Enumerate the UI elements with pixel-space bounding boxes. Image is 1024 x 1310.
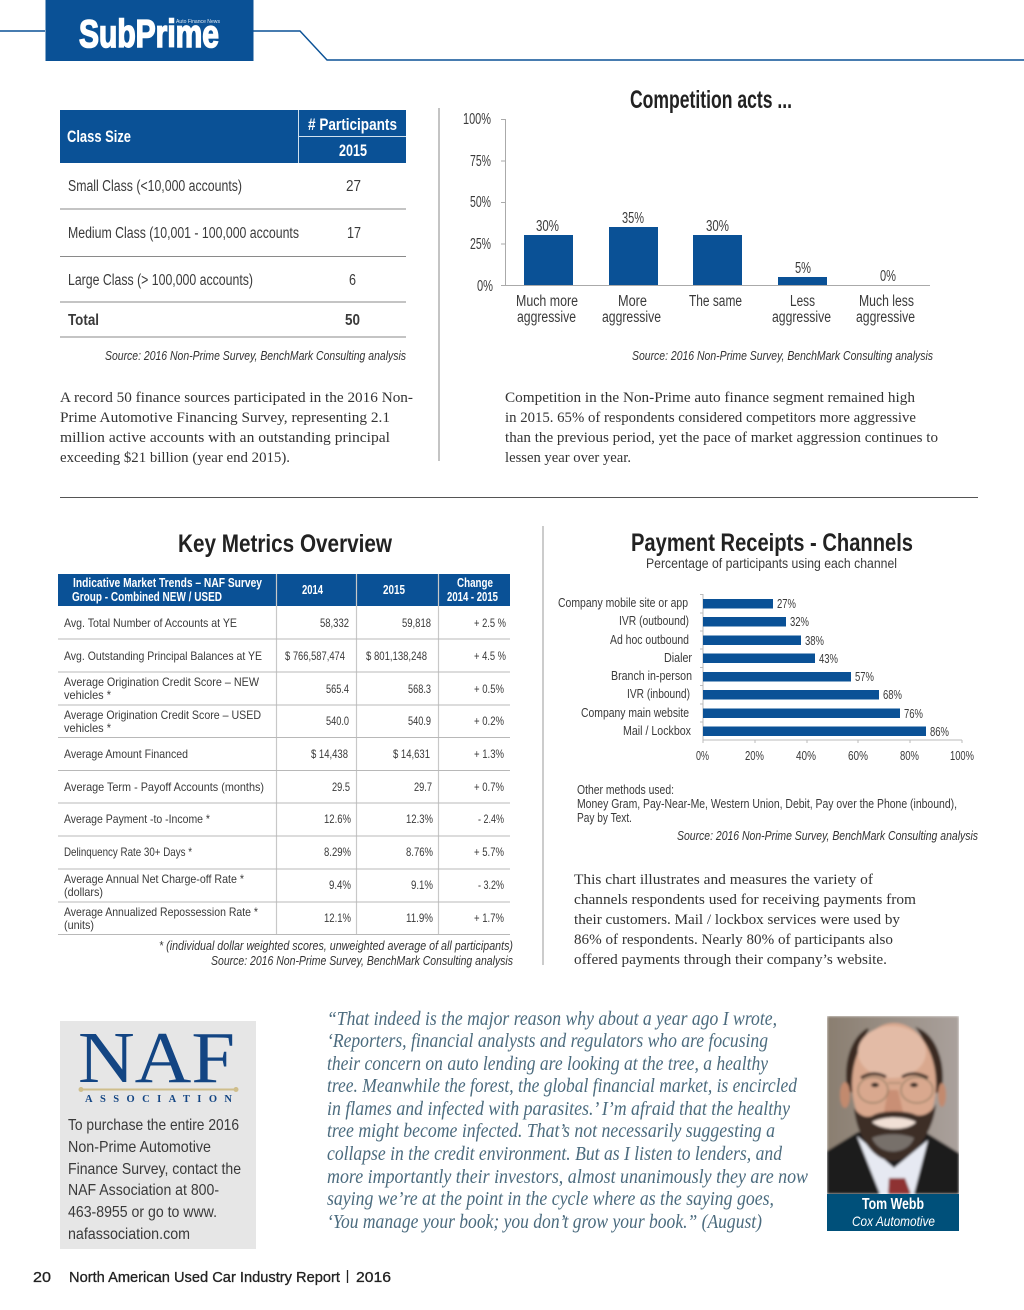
key metrics table: 8.29%	[324, 845, 351, 859]
class size table: Small Class (<10,000 accounts)	[68, 178, 242, 195]
NAF logo: ASSOCIATION	[85, 1094, 232, 1105]
key metrics table: 540.9	[408, 714, 431, 728]
masthead: Auto Finance News	[176, 19, 220, 25]
key metrics table: + 0.5%	[474, 682, 504, 696]
glasses	[858, 1077, 888, 1103]
key metrics table: 2014 - 2015	[447, 590, 498, 604]
hair sides	[847, 1029, 942, 1092]
paragraph: competition: in 2015. 65% of respondents considered competitors more aggressive	[505, 410, 916, 426]
paragraph: channels: their customers. Mail / lockbox services were used by	[574, 912, 900, 928]
key metrics table: (dollars)	[64, 885, 103, 899]
pull quote: in flames and infected with parasites.’ I’m afraid that the healthy	[327, 1099, 790, 1120]
bar chart: payment channels: Dialer	[664, 650, 693, 665]
key metrics table: (units)	[64, 918, 94, 932]
caption: name: Cox Automotive	[852, 1213, 935, 1229]
key metrics table: vehicles *	[64, 721, 111, 735]
key metrics table: 2014	[302, 583, 323, 597]
paragraph: competition: lessen year over year.	[505, 450, 631, 466]
bar chart: payment channels: 27%	[777, 596, 796, 611]
class size table: 27	[346, 178, 361, 195]
paragraph: competition	[505, 390, 938, 466]
key metrics table: 29.7	[414, 780, 432, 794]
shirt	[857, 1136, 928, 1194]
paragraph: channels: offered payments through their company’s website.	[574, 952, 887, 968]
source note: competition: Source: 2016 Non-Prime Survey, BenchMark Consulting analysis	[632, 348, 933, 363]
heading: competition acts: Competition acts ...	[630, 86, 792, 114]
key metrics table: 29.5	[332, 780, 350, 794]
beard	[854, 1104, 936, 1161]
paragraph: channels: channels respondents used for receiving payments from	[574, 892, 916, 908]
key metrics table: 9.4%	[329, 878, 351, 892]
nose	[884, 1090, 903, 1115]
bar chart: payment channels: 38%	[805, 633, 824, 648]
paragraph: channels: 86% of respondents. Nearly 80% of participants also	[574, 932, 893, 948]
bar chart: payment channels: Branch in-person	[611, 668, 692, 683]
key metrics table: 9.1%	[411, 878, 433, 892]
paragraph: participation: million active accounts with an outstanding principal	[60, 430, 390, 446]
bar chart: payment channels: 100%	[950, 748, 974, 763]
key metrics table: 568.3	[408, 682, 431, 696]
caption: name	[827, 1194, 959, 1231]
bar chart: payment channels: Ad hoc outbound	[610, 632, 689, 647]
bar chart: competition: 30%	[536, 218, 559, 235]
key metrics table: Avg. Total Number of Accounts at YE	[64, 616, 237, 630]
bar chart: competition: The same	[689, 293, 742, 310]
jacket	[827, 1132, 959, 1194]
NAF purchase text: 463-8955 or go to www.	[68, 1204, 217, 1221]
pull quote: saying we’re at the point in the cycle where as the saying goes,	[327, 1189, 774, 1210]
paragraph: participation	[60, 390, 413, 466]
key metrics table: - 3.2%	[478, 878, 504, 892]
table footnotes: * (individual dollar weighted scores, unweighted average of all participants)	[159, 938, 513, 953]
key metrics table: $ 801,138,248	[366, 649, 427, 663]
other methods note: Pay by Text.	[577, 810, 632, 825]
class size table: 17	[347, 225, 361, 242]
paragraph: participation: Prime Automotive Financing Survey, representing 2.1	[60, 410, 390, 426]
bar chart: payment channels: 80%	[900, 748, 919, 763]
key metrics table: 12.3%	[406, 812, 433, 826]
key metrics table: Indicative Market Trends – NAF Survey	[73, 576, 262, 590]
other methods note	[577, 782, 957, 825]
table footnotes	[159, 938, 513, 968]
key metrics table: 58,332	[320, 616, 349, 630]
key metrics table: + 2.5 %	[474, 616, 506, 630]
key metrics table: Avg. Outstanding Principal Balances at YE	[64, 649, 262, 663]
key metrics table: 12.6%	[324, 812, 351, 826]
key metrics table	[58, 574, 510, 934]
footer: North American Used Car Industry Report	[69, 1270, 340, 1286]
pull quote: ‘Reporters, financial analysts and regulators who are focusing	[327, 1031, 768, 1052]
footer: 2016	[356, 1270, 391, 1286]
bar chart: payment channels	[558, 594, 974, 763]
bar chart: payment channels: 60%	[848, 748, 868, 763]
key metrics table: $ 14,631	[393, 747, 430, 761]
bar chart: competition: 0%	[880, 268, 896, 285]
NAF purchase text: nafassociation.com	[68, 1226, 190, 1243]
other methods note: Other methods used:	[577, 782, 674, 797]
bar chart: competition: aggressive	[856, 309, 915, 326]
paragraph: channels: This chart illustrates and measures the variety of	[574, 872, 873, 888]
bar chart: payment channels: Company main website	[581, 705, 689, 720]
key metrics table: Average Payment -to -Income *	[64, 812, 210, 826]
key metrics table: 565.4	[326, 682, 349, 696]
masthead	[0, 0, 1024, 61]
key metrics table: + 0.7%	[474, 780, 504, 794]
portrait: Tom Webb	[827, 1016, 959, 1231]
pull quote: their concern on auto lending are looking at the tree, a healthy	[327, 1054, 768, 1075]
paragraph: channels	[574, 872, 916, 968]
key metrics table: Average Origination Credit Score – NEW	[64, 675, 260, 689]
bar chart: payment channels: 32%	[790, 614, 809, 629]
pull quote: tree might become infected. That’s not necessarily suggesting a	[327, 1121, 775, 1142]
bar chart: competition: aggressive	[772, 309, 831, 326]
paragraph: participation: exceeding $21 billion (year end 2015).	[60, 450, 290, 466]
pull quote: “That indeed is the major reason why about a year ago I wrote,	[327, 1009, 777, 1030]
class size table: Large Class (> 100,000 accounts)	[68, 272, 253, 289]
bar chart: competition: aggressive	[517, 309, 576, 326]
key metrics table: + 1.7%	[474, 911, 504, 925]
pull quote	[327, 1009, 808, 1233]
class size table: Medium Class (10,001 - 100,000 accounts	[68, 225, 299, 242]
class size table: 2015	[339, 142, 367, 160]
key metrics table: Average Origination Credit Score – USED	[64, 708, 261, 722]
bar chart: competition: 35%	[622, 210, 644, 227]
bar chart: payment channels: IVR (outbound)	[619, 613, 689, 628]
pull quote: ‘You manage your book; you don’t grow your book.” (August)	[327, 1212, 762, 1233]
key metrics table: Average Term - Payoff Accounts (months)	[64, 780, 264, 794]
caption: name: Tom Webb	[862, 1196, 924, 1213]
bar chart: competition: 30%	[706, 218, 729, 235]
key metrics table: Average Amount Financed	[64, 747, 188, 761]
key metrics table: - 2.4%	[478, 812, 504, 826]
key metrics table: $ 14,438	[311, 747, 348, 761]
key metrics table: + 1.3%	[474, 747, 504, 761]
key metrics table: $ 766,587,474	[285, 649, 345, 663]
key metrics table: 8.76%	[406, 845, 433, 859]
class size table: 6	[349, 272, 356, 289]
key metrics table: + 4.5 %	[474, 649, 506, 663]
bar chart: payment channels: 40%	[796, 748, 816, 763]
source note: class size: Source: 2016 Non-Prime Survey, BenchMark Consulting analysis	[105, 348, 406, 363]
class size table	[60, 110, 406, 337]
NAF purchase text: Finance Survey, contact the	[68, 1161, 241, 1178]
paragraph: competition: than the previous period, yet the pace of market aggression continues to	[505, 430, 938, 446]
NAF logo: NAF	[78, 1017, 235, 1098]
class size table: Class Size	[67, 128, 131, 146]
bar chart: payment channels: Company mobile site or app	[558, 595, 688, 610]
bar chart: competition: 50%	[470, 194, 491, 211]
bar chart: competition: Much more	[516, 293, 578, 310]
bar chart: payment channels: 76%	[904, 706, 923, 721]
bar chart: payment channels: 68%	[883, 687, 902, 702]
bar chart: competition: 75%	[470, 153, 491, 170]
key metrics table: 2015	[383, 583, 405, 597]
bar chart: competition: Less	[790, 293, 815, 310]
masthead: SubPrime	[79, 13, 219, 56]
bar chart: competition: 25%	[470, 236, 491, 253]
footer: 20	[33, 1270, 51, 1286]
bar chart: competition: Much less	[859, 293, 914, 310]
key metrics table: + 5.7%	[474, 845, 504, 859]
bar chart: payment channels: 86%	[930, 724, 949, 739]
bar chart: payment channels: 20%	[745, 748, 764, 763]
NAF purchase text: To purchase the entire 2016	[68, 1117, 239, 1134]
bar chart: competition: 100%	[463, 111, 491, 128]
heading: payment receipts: Payment Receipts - Channels	[631, 529, 913, 557]
bar chart: competition: 5%	[795, 260, 811, 277]
pull quote: collapse in the credit environment. But as I listen to lenders, and	[327, 1144, 782, 1165]
bar chart: competition: 0%	[477, 278, 493, 295]
eyes and brows	[861, 1074, 928, 1078]
key metrics table: 59,818	[402, 616, 431, 630]
bar chart: payment channels: 43%	[819, 651, 838, 666]
tie	[888, 1178, 911, 1194]
key metrics table: Change	[457, 576, 493, 590]
key metrics table: 12.1%	[324, 911, 351, 925]
ears	[840, 1082, 850, 1108]
face	[850, 1022, 938, 1119]
key metrics table: Average Annualized Repossession Rate *	[64, 905, 258, 919]
heading: key metrics overview: Key Metrics Overview	[178, 530, 392, 558]
NAF purchase text	[68, 1117, 241, 1243]
bar chart: payment channels: IVR (inbound)	[627, 686, 690, 701]
paragraph: competition: Competition in the Non-Prime auto finance segment remained high	[505, 390, 915, 406]
paragraph: participation: A record 50 finance sources participated in the 2016 Non-	[60, 390, 413, 406]
bar chart: competition	[463, 111, 930, 326]
pull quote: tree. Meanwhile the forest, the global financial market, is encircled	[327, 1076, 797, 1097]
key metrics table: vehicles *	[64, 688, 111, 702]
bar chart: payment channels: Mail / Lockbox	[623, 723, 691, 738]
NAF purchase text: NAF Association at 800-	[68, 1182, 219, 1199]
key metrics table: 540.0	[326, 714, 349, 728]
bar chart: competition: More	[618, 293, 647, 310]
key metrics table: + 0.2%	[474, 714, 504, 728]
class size table: Total	[68, 312, 99, 329]
class size table: 50	[345, 312, 360, 329]
pull quote: more importantly their investors, almost unanimously they are now	[327, 1167, 808, 1188]
bar chart: competition: aggressive	[602, 309, 661, 326]
bar chart: payment channels: 57%	[855, 669, 874, 684]
bar chart: payment channels: 0%	[696, 748, 709, 763]
class size table: # Participants	[308, 116, 397, 134]
panel: NAF association	[60, 1017, 256, 1249]
key metrics table: Group - Combined NEW / USED	[72, 590, 222, 604]
subheading: payment receipts: Percentage of participants using each channel	[646, 555, 897, 571]
key metrics table: 11.9%	[406, 911, 433, 925]
key metrics table: Delinquency Rate 30+ Days *	[64, 845, 192, 859]
key metrics table: Average Annual Net Charge-off Rate *	[64, 872, 244, 886]
table footnotes: Source: 2016 Non-Prime Survey, BenchMark Consulting analysis	[211, 953, 513, 968]
NAF purchase text: Non-Prime Automotive	[68, 1139, 211, 1156]
